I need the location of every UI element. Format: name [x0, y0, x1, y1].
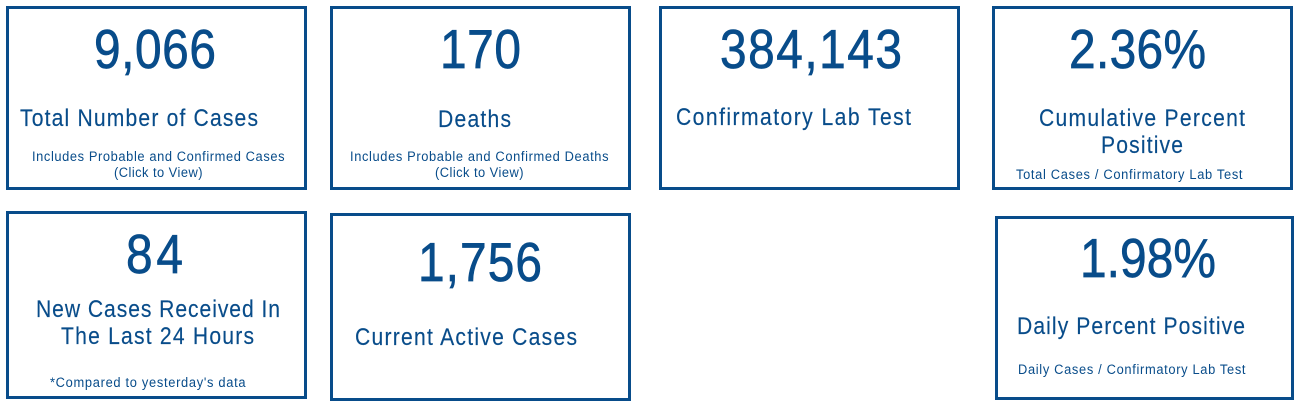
panel: total cases: (Click to View)	[114, 165, 203, 180]
panel: cumulative percent positive: Positive	[1101, 132, 1183, 158]
panel: daily percent positive: Daily Cases / Confirmatory Lab Test	[1018, 362, 1246, 377]
panel: new cases: The Last 24 Hours	[61, 323, 254, 349]
panel: daily percent positive: 1.98%	[1080, 227, 1216, 289]
panel: confirmatory lab test: 384,143	[720, 18, 902, 80]
panel: total cases: Total Number of Cases	[20, 105, 258, 131]
panel: cumulative percent positive	[994, 8, 1292, 188]
panel: daily percent positive	[996, 218, 1292, 398]
panel: deaths: Includes Probable and Confirmed Deaths	[350, 149, 609, 164]
panel: current active cases	[332, 214, 630, 400]
panel: new cases	[8, 212, 306, 398]
panel: deaths: Deaths	[438, 106, 511, 132]
panel: total cases: Includes Probable and Confirmed Cases	[32, 149, 285, 164]
panel: current active cases: Current Active Cases	[355, 324, 577, 350]
panel: cumulative percent positive: 2.36%	[1069, 18, 1206, 80]
panel: new cases: *Compared to yesterday's data	[50, 375, 246, 390]
panel: confirmatory lab test: Confirmatory Lab Test	[676, 104, 912, 130]
panel: new cases: 84	[126, 223, 183, 285]
panel: total cases: 9,066	[94, 18, 216, 80]
panel: cumulative percent positive: Cumulative Percent	[1039, 105, 1246, 131]
panel: deaths: 170	[440, 18, 521, 80]
panel: deaths: (Click to View)	[435, 165, 524, 180]
panel: cumulative percent positive: Total Cases / Confirmatory Lab Test	[1016, 167, 1243, 182]
panel: deaths	[332, 8, 630, 188]
panel: new cases: New Cases Received In	[36, 296, 280, 322]
panel: current active cases: 1,756	[418, 231, 542, 293]
panel: daily percent positive: Daily Percent Positive	[1017, 313, 1245, 339]
panel: total cases	[8, 8, 306, 188]
panel: confirmatory lab test	[660, 8, 958, 188]
